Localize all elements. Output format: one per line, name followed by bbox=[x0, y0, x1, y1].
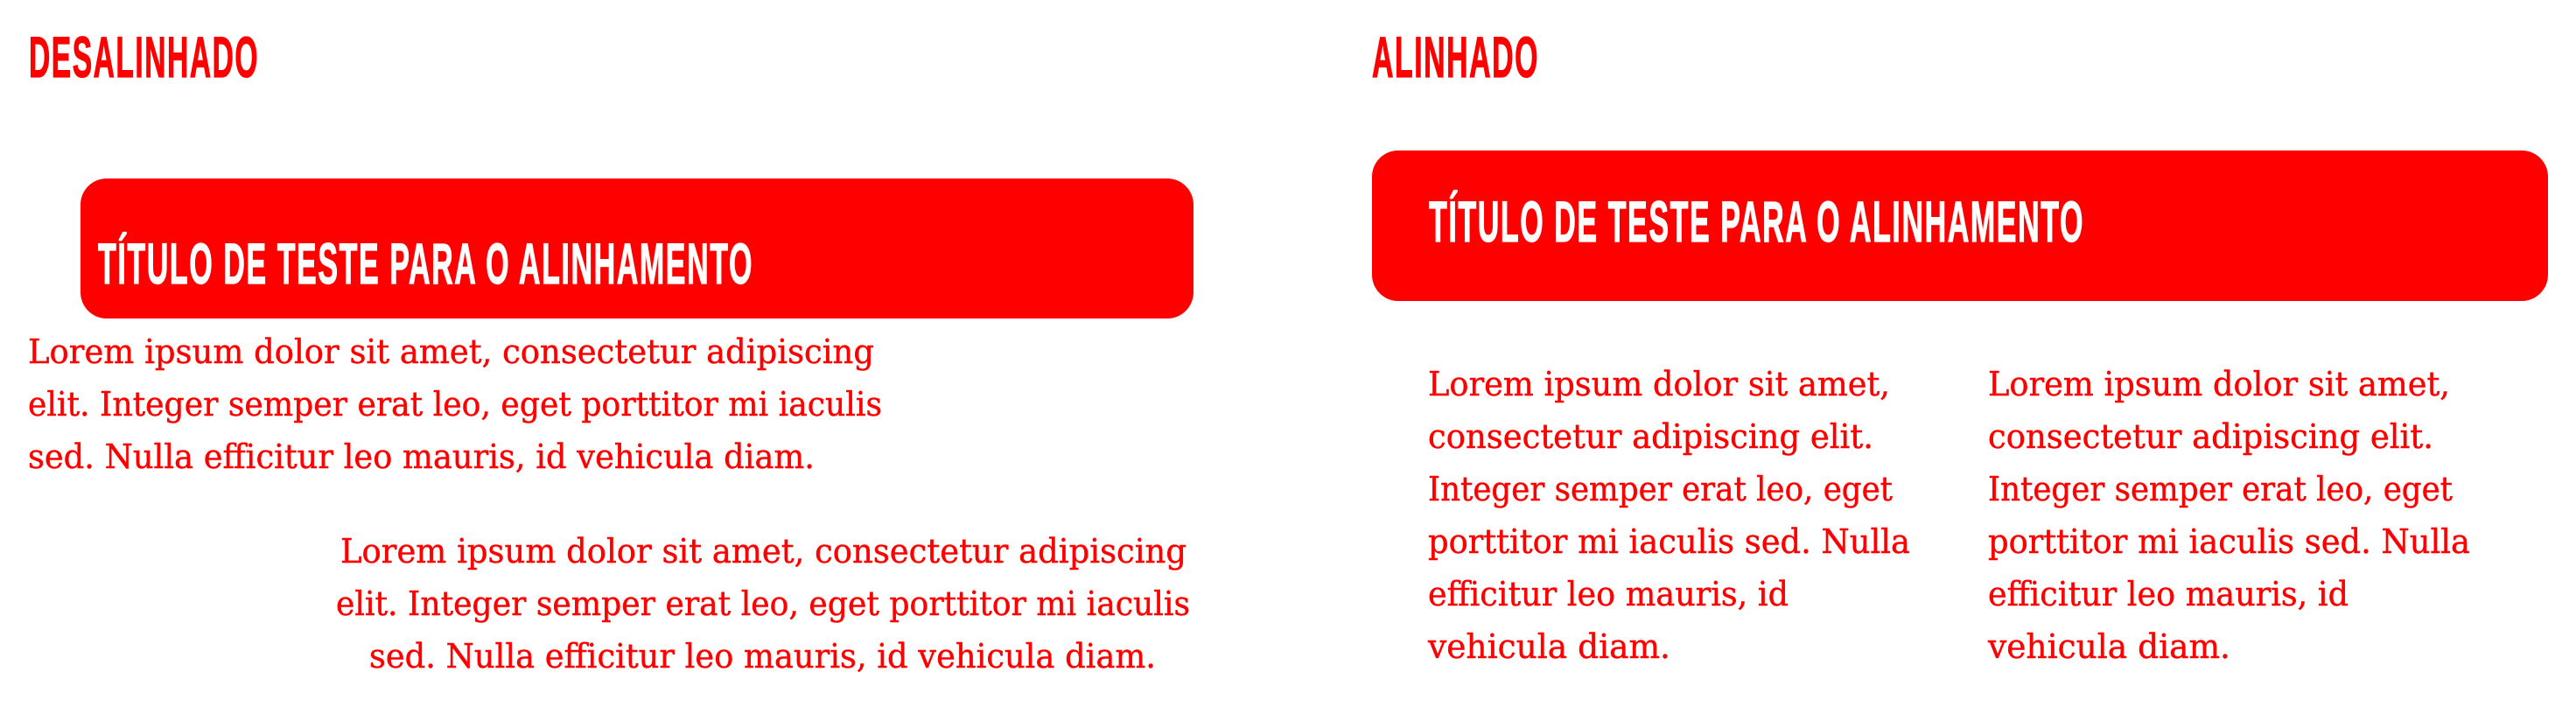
text block: aligned column 1: consectetur adipiscing elit. bbox=[1428, 417, 1873, 456]
text block: aligned column 2: consectetur adipiscing elit. bbox=[1988, 417, 2433, 456]
text block: left-aligned paragraph: sed. Nulla efficitur leo mauris, id vehicula diam. bbox=[28, 438, 815, 476]
title text: TÍTULO DE TESTE PARA O ALINHAMENTO bbox=[98, 231, 753, 296]
text block: aligned column 1: Lorem ipsum dolor sit amet, bbox=[1428, 365, 1890, 403]
text block: aligned column 1: porttitor mi iaculis sed. Nulla bbox=[1428, 522, 1910, 561]
heading: desalinhado: DESALINHADO bbox=[29, 24, 259, 89]
text block: aligned column 2: vehicula diam. bbox=[1987, 627, 2230, 666]
panel: misaligned title bar bbox=[80, 178, 1194, 318]
text block: centered paragraph: elit. Integer semper erat leo, eget porttitor mi iaculis bbox=[336, 584, 1190, 623]
text block: left-aligned paragraph: elit. Integer semper erat leo, eget porttitor mi iaculis bbox=[28, 385, 882, 424]
title bar background bbox=[1372, 150, 2548, 301]
text block: aligned column 1: vehicula diam. bbox=[1427, 627, 1670, 666]
text block: aligned column 2: Integer semper erat leo, eget bbox=[1988, 470, 2453, 508]
text block: aligned column 2: efficitur leo mauris, id bbox=[1988, 575, 2348, 613]
text block: left-aligned paragraph: Lorem ipsum dolor sit amet, consectetur adipiscing bbox=[28, 332, 874, 371]
text block: aligned column 2: Lorem ipsum dolor sit amet, bbox=[1988, 365, 2450, 403]
text block: left-aligned paragraph bbox=[28, 332, 882, 476]
text block: centered paragraph bbox=[336, 532, 1190, 676]
text block: aligned column 1 bbox=[1427, 365, 1910, 666]
text block: centered paragraph: Lorem ipsum dolor sit amet, consectetur adipiscing bbox=[340, 532, 1186, 570]
text block: aligned column 1: Integer semper erat leo, eget bbox=[1428, 470, 1893, 508]
title bar background bbox=[80, 178, 1194, 318]
text block: aligned column 2 bbox=[1987, 365, 2470, 666]
text block: centered paragraph: sed. Nulla efficitur leo mauris, id vehicula diam. bbox=[369, 637, 1156, 676]
heading: alinhado: ALINHADO bbox=[1372, 24, 1539, 89]
text block: aligned column 2: porttitor mi iaculis sed. Nulla bbox=[1988, 522, 2470, 561]
panel: aligned title bar bbox=[1372, 150, 2548, 301]
text block: aligned column 1: efficitur leo mauris, id bbox=[1428, 575, 1788, 613]
